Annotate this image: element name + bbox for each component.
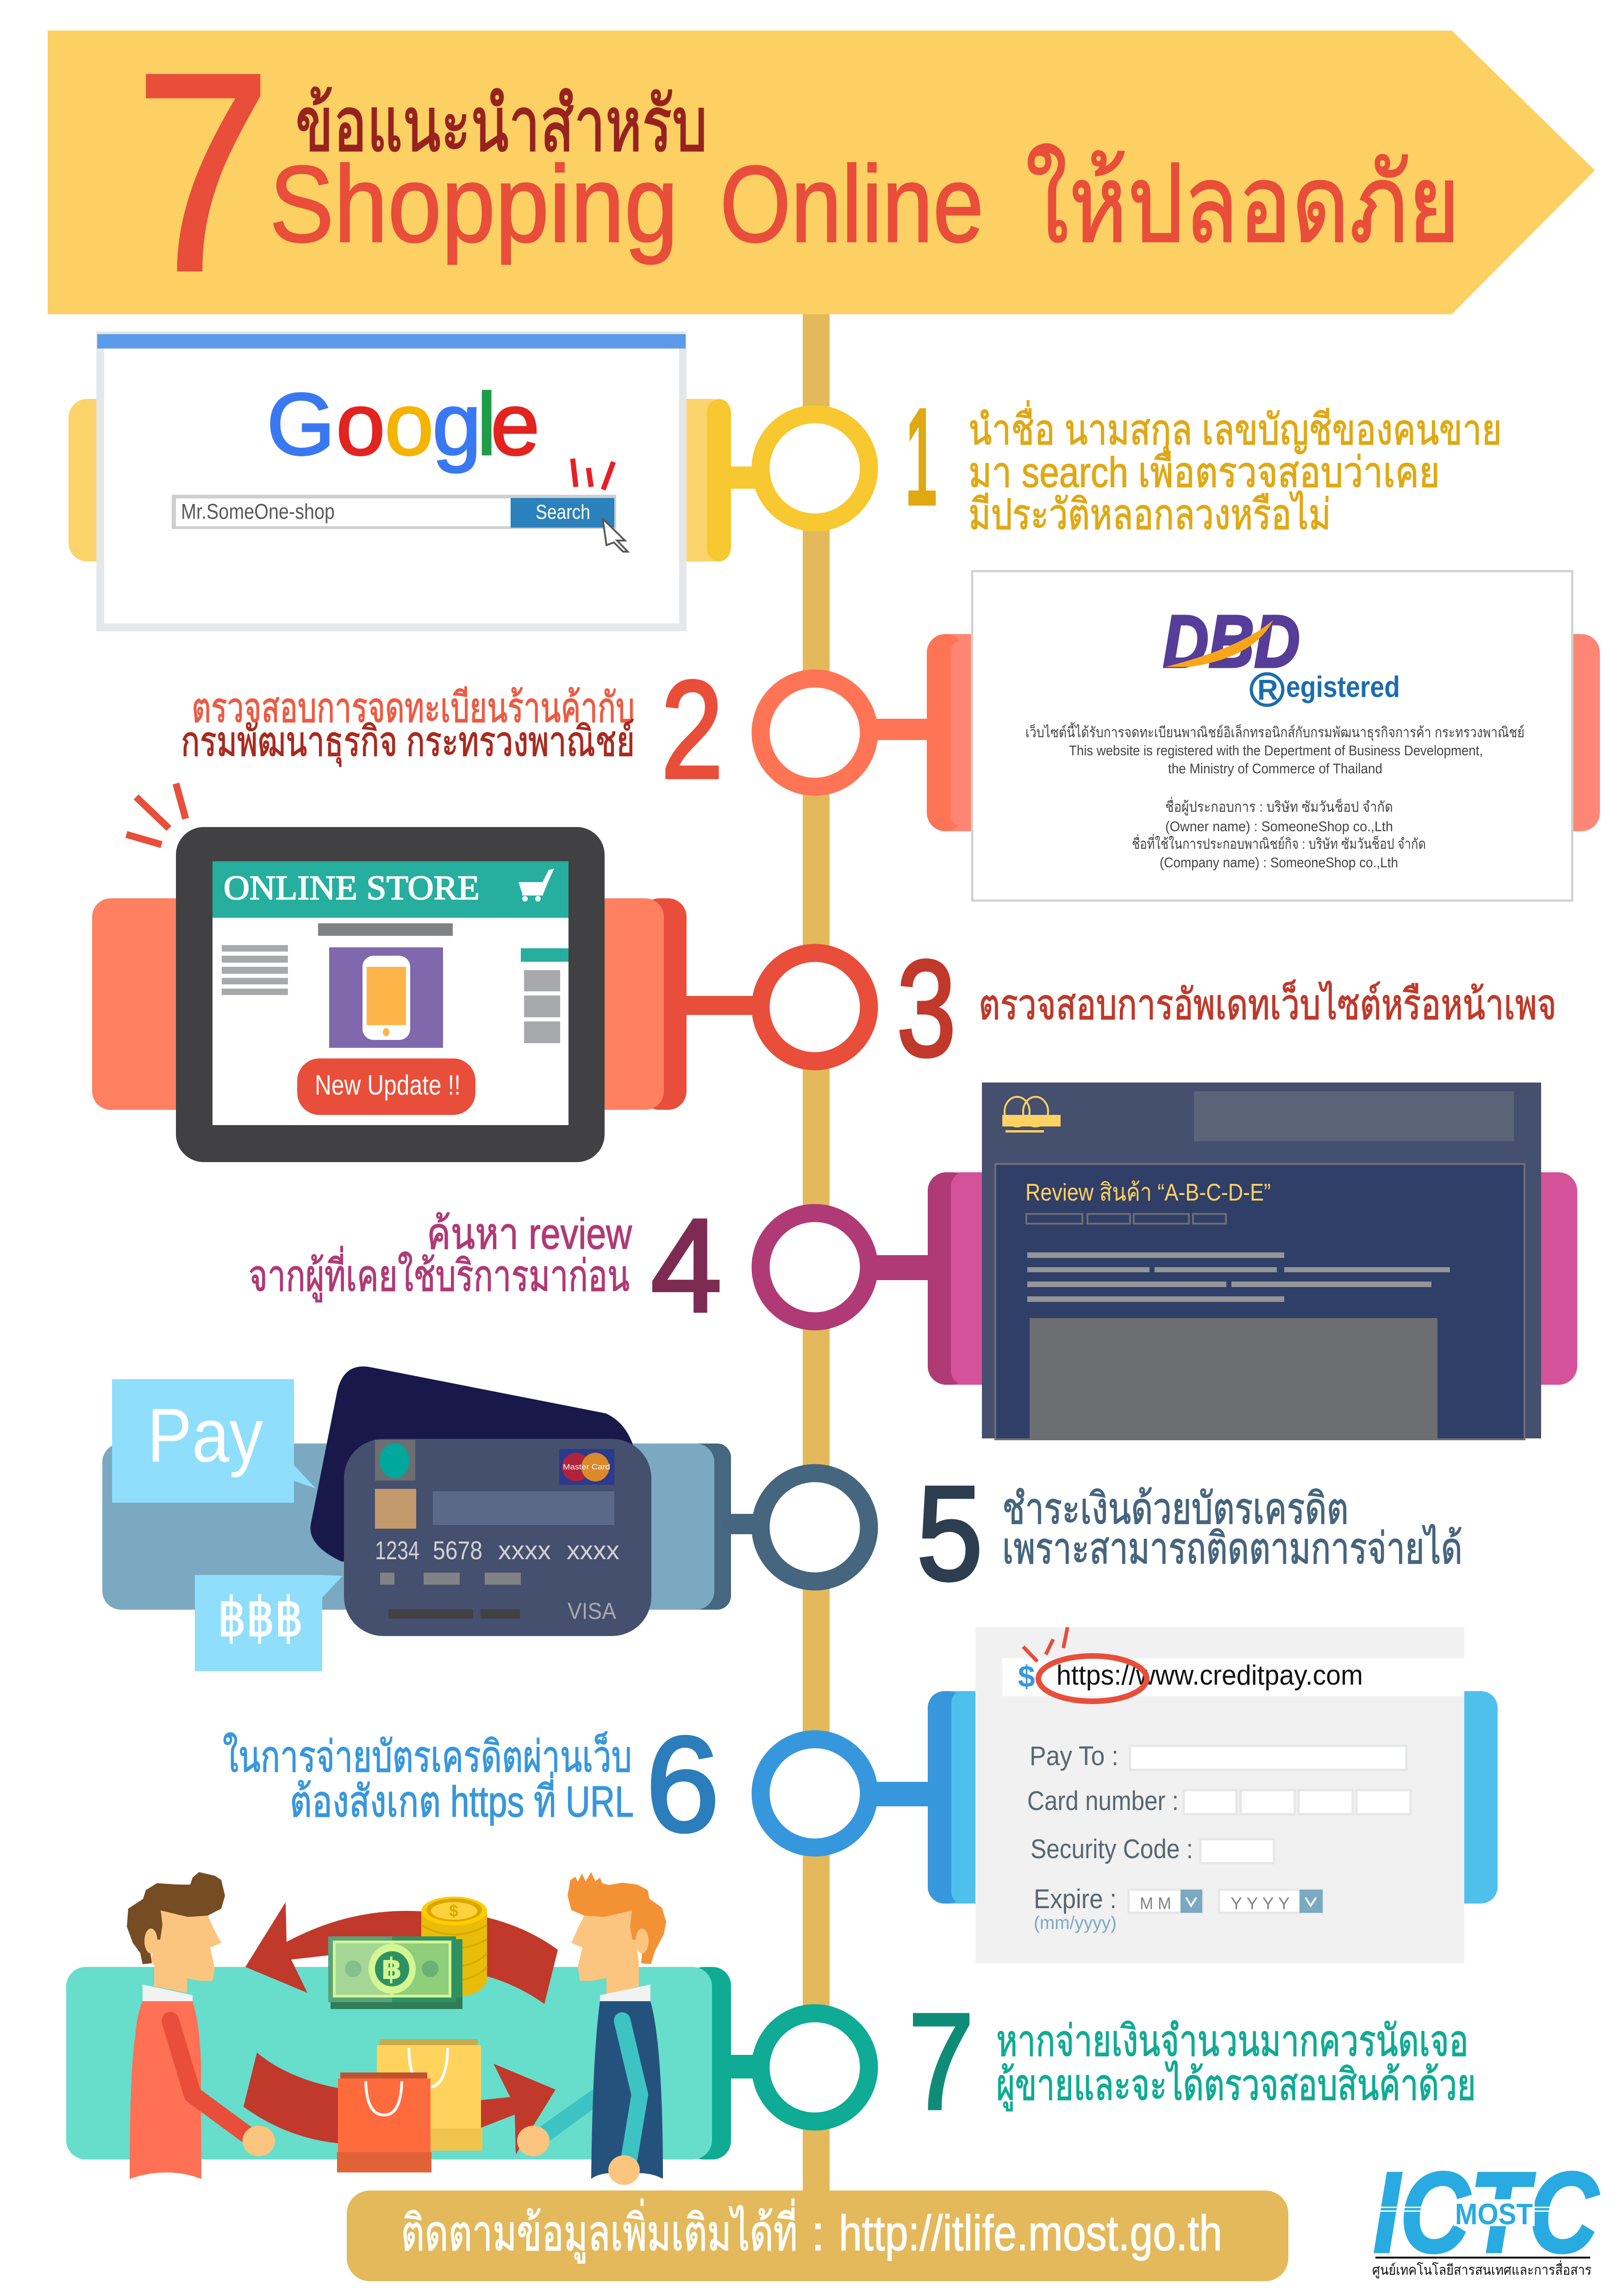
step 2 text: ตรวจสอบการจดทะเบียนร้านค้ากับ <box>192 685 635 731</box>
step 4 number: 4 <box>651 1191 722 1339</box>
form labels: Expire : <box>1034 1884 1117 1914</box>
card number: xxxx <box>498 1536 551 1565</box>
step 6 ring <box>761 1739 869 1848</box>
panel: DBD registered certificate <box>972 571 1572 901</box>
step 2 ring <box>761 678 869 787</box>
orange shopping bag <box>337 2072 431 2172</box>
certificate text: the Ministry of Commerce of Thailand <box>1168 760 1382 777</box>
credit card wallet <box>311 1366 637 1562</box>
logo: ICTC MOST: MOST <box>1455 2197 1533 2231</box>
pay speech bubble <box>112 1379 316 1503</box>
step 5 number: 5 <box>917 1458 983 1608</box>
step 1 band and connector <box>69 399 764 561</box>
step 7 band and connector <box>66 1967 764 2159</box>
step 6 text: ต้องสังเกต https ที่ URL <box>290 1772 634 1826</box>
coin stack <box>421 1897 487 1997</box>
step 7 number: 7 <box>908 1985 974 2138</box>
store header <box>212 861 568 918</box>
title number 7: 7 <box>135 15 271 330</box>
certificate text: ชื่อผู้ประกอบการ : บริษัท ซัมวันช็อป จำกัด <box>1165 797 1393 815</box>
attention marks on tablet <box>126 784 186 845</box>
coin stack: $ <box>449 1901 458 1920</box>
search box <box>172 495 616 529</box>
attention marks <box>573 459 613 490</box>
right person <box>517 1872 666 2185</box>
footer bar <box>347 2190 1288 2281</box>
url bar <box>1002 1627 1464 1701</box>
step 7 ring <box>761 2013 869 2122</box>
url bar: $ <box>1018 1659 1035 1693</box>
step 3 ring <box>761 953 869 1061</box>
pay speech bubble: Pay <box>147 1393 263 1478</box>
form labels <box>1027 1741 1193 1914</box>
step 2 band and connector <box>870 634 1600 831</box>
yellow shopping bag <box>377 2039 482 2151</box>
step 6 text: ในการจ่ายบัตรเครดิตผ่านเว็บ <box>223 1731 632 1781</box>
step 1 text: นำชื่อ นามสกุล เลขบัญชีของคนขาย <box>968 400 1502 456</box>
new update button <box>297 1058 475 1115</box>
timeline trunk <box>803 310 830 2194</box>
mastercard logo <box>559 1449 614 1485</box>
form labels: Card number : <box>1027 1786 1179 1816</box>
title line 2: ให้ปลอดภัย <box>1025 143 1460 265</box>
step 2 text <box>181 685 635 767</box>
google logo <box>267 375 540 473</box>
title banner <box>48 15 1595 330</box>
step 4 text: จากผู้ที่เคยใช้บริการมาก่อน <box>249 1246 630 1302</box>
registered mark: R <box>1257 674 1278 706</box>
google logo: o <box>385 375 434 473</box>
new update button: New Update !! <box>315 1070 461 1101</box>
store header: ONLINE STORE <box>224 869 480 907</box>
certificate text: เว็บไซต์นี้ได้รับการจดทะเบียนพาณิชย์อิเล็กทรอนิกส์กับกรมพัฒนาธุรกิจการค้า กระทรวงพาณิชย์ <box>1025 722 1524 741</box>
left person <box>127 1872 275 2179</box>
google logo: G <box>267 375 335 473</box>
panel: payment form <box>975 1627 1464 1963</box>
step 1 text: มา search เพื่อตรวจสอบว่าเคย <box>968 443 1440 496</box>
text line placeholders <box>1027 1252 1450 1302</box>
google logo: o <box>336 375 385 473</box>
panel: google search window <box>96 331 687 631</box>
cursor icon <box>603 519 628 552</box>
title line 2: Shopping <box>269 143 678 265</box>
registered mark <box>1251 670 1400 706</box>
review heading: Review สินค้า “A-B-C-D-E” <box>1025 1179 1271 1206</box>
step 6 number: 6 <box>646 1709 719 1860</box>
step 6 text <box>223 1731 634 1826</box>
mastercard logo: Master Card <box>563 1462 610 1471</box>
title line 2: Online <box>720 143 984 265</box>
certificate text: (Company name) : SomeoneShop co.,Lth <box>1160 854 1398 871</box>
registered mark: egistered <box>1286 670 1400 703</box>
banknotes <box>328 1936 462 2009</box>
text: 1 <box>905 382 937 532</box>
step 5 band and connector <box>102 1444 764 1610</box>
step 7 text <box>996 2016 1476 2111</box>
form labels: Security Code : <box>1031 1834 1193 1864</box>
title line 2 <box>269 143 1460 265</box>
month and year selects <box>1140 1890 1323 1913</box>
footer bar: : <box>811 2205 825 2261</box>
form labels: Pay To : <box>1030 1741 1118 1771</box>
logo: ICTC MOST: ศูนย์เทคโนโลยีสารสนเทศและการสื่อสาร <box>1372 2260 1592 2278</box>
form inputs <box>1129 1746 1411 1913</box>
certificate text: This website is registered with the Depertment of Business Development, <box>1069 742 1483 759</box>
step 7 text: หากจ่ายเงินจำนวนมากควรนัดเจอ <box>996 2016 1468 2065</box>
step 1 text: มีประวัติหลอกลวงหรือไม่ <box>968 491 1331 538</box>
icon: shopping cart <box>518 869 554 902</box>
icon: review page logo <box>1002 1097 1061 1132</box>
credit card <box>344 1439 651 1636</box>
step 5 text: ชำระเงินด้วยบัตรเครดิต <box>1002 1484 1349 1533</box>
step 3 number: 3 <box>897 932 956 1085</box>
baht speech bubble <box>195 1575 343 1671</box>
step 2 number: 2 <box>661 652 723 807</box>
panel: review page <box>982 1083 1541 1439</box>
search box: Search <box>536 501 590 523</box>
certificate text <box>1025 722 1524 871</box>
google logo: l <box>477 375 496 473</box>
step 4 text: ค้นหา review <box>427 1209 632 1258</box>
card number: 5678 <box>433 1536 482 1565</box>
panel: payment form: (mm/yyyy) <box>1034 1913 1117 1933</box>
baht speech bubble: ฿฿฿ <box>218 1587 303 1649</box>
tabs <box>1026 1214 1226 1224</box>
arrow: goods exchange <box>244 2053 556 2154</box>
card number <box>375 1536 619 1565</box>
step 1 text <box>968 400 1502 538</box>
step 2 text: กรมพัฒนาธุรกิจ กระทรวงพาณิชย์ <box>181 719 635 767</box>
step 4 band and connector <box>870 1172 1577 1385</box>
illustration: two people exchanging money and goods <box>127 1872 666 2185</box>
sidebar <box>521 948 568 1043</box>
step 5 ring <box>761 1473 869 1581</box>
DBD logo: DBD <box>1163 600 1300 683</box>
step 1 ring <box>761 414 869 523</box>
certificate text: ชื่อที่ใช้ในการประกอบพาณิชย์กิจ : บริษัท ซัมวันช็อป จำกัด <box>1132 834 1426 852</box>
google logo: g <box>432 375 481 473</box>
google logo: e <box>491 375 540 473</box>
card number: xxxx <box>567 1536 619 1565</box>
arrow: money exchange <box>245 1902 558 2004</box>
product image <box>329 947 443 1048</box>
step 4 ring <box>761 1213 869 1321</box>
step 6 band and connector <box>870 1691 1498 1904</box>
step 3 band and connector <box>92 898 764 1110</box>
certificate text: (Owner name) : SomeoneShop co.,Lth <box>1165 818 1393 834</box>
step 4 text <box>249 1209 632 1302</box>
footer bar: http://itlife.most.go.th <box>839 2205 1222 2261</box>
panel: tablet online store <box>176 827 605 1162</box>
footer bar: ติดตามข้อมูลเพิ่มเติมได้ที่ <box>401 2199 798 2264</box>
text list placeholder <box>222 945 288 995</box>
visa label: VISA <box>568 1598 617 1624</box>
month and year selects: M M <box>1140 1894 1171 1913</box>
card number: 1234 <box>375 1536 419 1565</box>
banknotes: ฿ <box>381 1952 402 1986</box>
step 5 text <box>1002 1484 1462 1573</box>
title line 1: ข้อแนะนำสำหรับ <box>295 82 707 167</box>
url bar: https://www.creditpay.com <box>1056 1660 1363 1691</box>
month and year selects: Y Y Y Y <box>1230 1894 1290 1913</box>
search box: Mr.SomeOne-shop <box>181 499 335 523</box>
step 5 text: เพราะสามารถติดตามการจ่ายได้ <box>1002 1524 1462 1573</box>
